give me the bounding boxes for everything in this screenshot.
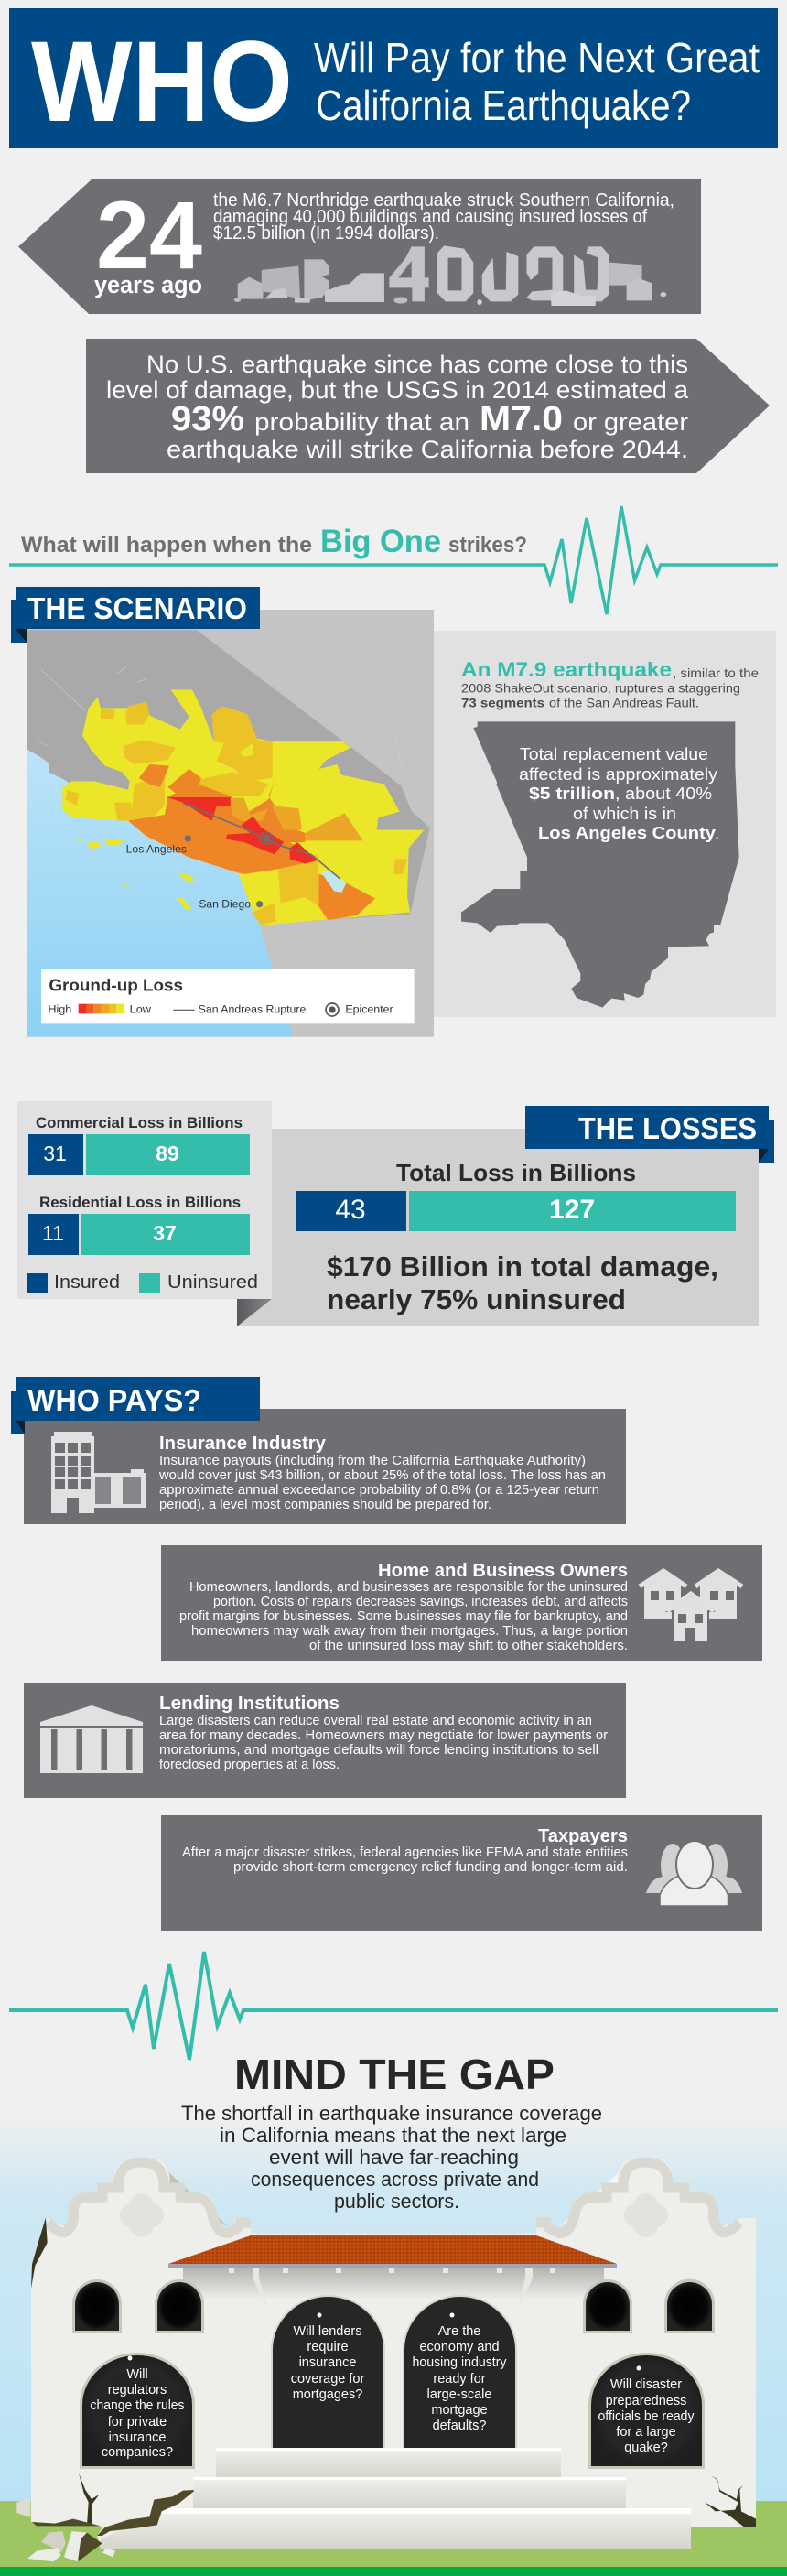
home body <box>179 1580 628 1653</box>
right crack <box>705 2475 756 2527</box>
text: shortfall paragraph: consequences across private and <box>251 2168 539 2191</box>
home heading: Home and Business Owners <box>378 1561 628 1581</box>
residential heading: Residential Loss in Billions <box>39 1194 241 1211</box>
insurance heading: Insurance Industry <box>159 1434 327 1454</box>
door: economy question <box>403 2295 517 2451</box>
city: Los Angeles <box>126 835 191 856</box>
total damage callout: nearly 75% uninsured <box>327 1283 626 1315</box>
epicenter marker <box>260 832 273 844</box>
M7.9 text <box>461 658 759 710</box>
text: shortfall paragraph <box>181 2102 602 2213</box>
insurance body: would cover just $43 billion, or about 25% of the total loss. The loss has an <box>158 1468 606 1483</box>
section tag: THE SCENARIO: THE SCENARIO <box>27 591 247 625</box>
years ago: years ago <box>94 271 202 298</box>
replacement value text: affected is approximately <box>519 764 718 784</box>
city: Los Angeles: Los Angeles <box>126 844 187 856</box>
bar: commercial <box>28 1134 250 1175</box>
left gable band <box>48 2162 251 2233</box>
door: economy question: economy and <box>419 2340 500 2354</box>
door: lenders question: require <box>307 2340 349 2354</box>
Northridge description: damaging 40,000 buildings and causing insured losses of <box>213 207 647 227</box>
taxpayers heading: Taxpayers <box>538 1826 628 1846</box>
right quatrefoil <box>624 2193 668 2237</box>
window: regulators question <box>80 2353 195 2469</box>
left tower side shade <box>166 2170 229 2227</box>
text: shortfall paragraph: event will have far-reaching <box>269 2146 519 2169</box>
replacement value text: Los Angeles County <box>538 823 717 842</box>
probability text <box>106 351 689 463</box>
seismic line <box>9 506 778 614</box>
map legend: Ground-up Loss <box>49 976 183 995</box>
probability text: level of damage, but the USGS in 2014 estimated a <box>106 376 689 404</box>
arrow panel: 24 years ago <box>18 179 701 314</box>
building wall <box>31 2157 756 2549</box>
text: shortfall paragraph: public sectors. <box>334 2190 459 2213</box>
text: shortfall paragraph: The shortfall in earthquake insurance coverage <box>181 2102 602 2125</box>
rafter tails <box>229 2268 555 2306</box>
bar: residential: 11 <box>42 1221 64 1245</box>
steps <box>101 2448 691 2549</box>
total damage callout <box>327 1250 718 1315</box>
heading: mind the gap: MIND THE GAP <box>234 2051 555 2098</box>
probability text: No U.S. earthquake since has come close to this <box>146 351 688 378</box>
lending body <box>159 1714 608 1772</box>
panel: insurance industry <box>24 1409 626 1524</box>
insurance body: Insurance payouts (including from the California Earthquake Authority) <box>159 1454 586 1468</box>
bar: total loss <box>296 1191 736 1231</box>
map legend: High <box>48 1003 71 1016</box>
replacement value text: , about 40% <box>615 784 712 803</box>
M7.9 text: 2008 ShakeOut scenario, ruptures a staggering <box>461 681 740 696</box>
window: preparedness question: for a large <box>616 2425 676 2440</box>
sky background <box>0 2115 787 2501</box>
taxpayers body: provide short-term emergency relief funding and longer-term aid. <box>233 1860 628 1875</box>
replacement value text: $5 trillion <box>529 784 615 803</box>
icon: houses <box>640 1571 742 1642</box>
roof <box>168 2235 617 2268</box>
section tag: WHO PAYS?: WHO PAYS? <box>27 1383 201 1417</box>
door: economy question: housing industry <box>412 2355 507 2370</box>
window: regulators question: insurance <box>109 2430 166 2445</box>
map legend: Low <box>130 1003 151 1016</box>
panel: taxpayers <box>161 1815 762 1931</box>
map islands <box>73 839 195 909</box>
right gable band <box>536 2162 739 2233</box>
heading: what will happen <box>21 524 527 559</box>
replacement value text: of which is in <box>573 804 676 823</box>
map legend: San Andreas Rupture <box>199 1003 307 1016</box>
window: regulators question: companies? <box>102 2445 173 2460</box>
probability text: 93% <box>171 400 244 438</box>
window: preparedness question: quake? <box>624 2441 668 2455</box>
panel fold <box>237 1299 272 1326</box>
lending body: Large disasters can reduce overall real estate and economic activity in an <box>159 1714 592 1728</box>
seismic line <box>9 1952 778 2060</box>
taxpayers body: After a major disaster strikes, federal agencies like FEMA and state entities <box>182 1845 628 1860</box>
window: preparedness question: officials be ready <box>598 2409 695 2424</box>
illustration: 40,000 rubble skyline <box>234 245 666 306</box>
door: economy question: mortgage <box>431 2403 488 2418</box>
bar: total loss: 127 <box>549 1195 595 1225</box>
probability text: or greater <box>573 408 688 436</box>
total loss heading: Total Loss in Billions <box>396 1159 636 1186</box>
legend <box>27 1272 258 1293</box>
M7.9 text: 73 segments <box>461 696 544 710</box>
lending heading: Lending Institutions <box>159 1694 340 1714</box>
replacement value text <box>519 744 719 842</box>
heading: what will happen: What will happen when the <box>21 533 312 557</box>
insurance body: period), a level most companies should be prepared for. <box>159 1498 491 1512</box>
section tag: THE LOSSES: THE LOSSES <box>578 1111 757 1145</box>
home body: of the uninsured loss may shift to other stakeholders. <box>309 1639 628 1653</box>
rubble <box>27 2531 115 2561</box>
panel: lending institutions <box>24 1683 626 1798</box>
home body: portion. Costs of repairs decreases savings, increases debt, and affects <box>213 1595 628 1609</box>
San Andreas rupture line <box>183 803 340 879</box>
icon: bank <box>40 1705 143 1773</box>
panel: home and business owners <box>161 1545 762 1661</box>
M7.9 text: , similar to the <box>673 666 759 680</box>
Northridge description: the M6.7 Northridge earthquake struck Southern California, <box>213 190 674 211</box>
title: rest of headline: California Earthquake? <box>316 81 691 129</box>
Los Angeles County shape <box>461 721 739 1008</box>
replacement value text: . <box>715 823 719 842</box>
map: ground-up loss <box>27 610 434 1037</box>
M7.9 text: An M7.9 earthquake <box>461 658 672 681</box>
big number 24: 24 <box>96 182 202 289</box>
city: San Diego: San Diego <box>199 899 251 911</box>
door: economy question: Are the <box>438 2324 480 2339</box>
Northridge description <box>213 190 674 244</box>
total damage callout: $170 Billion in total damage, <box>327 1250 718 1283</box>
left quatrefoil <box>120 2193 164 2237</box>
bar: commercial: 31 <box>43 1142 67 1165</box>
section tag: THE LOSSES <box>525 1106 774 1163</box>
lending body: moratoriums, and mortgage defaults will force lending institutions to sell <box>159 1743 598 1758</box>
map rivers <box>38 666 433 827</box>
section tag: THE SCENARIO <box>11 587 260 643</box>
illustration: damaged mission building <box>16 2157 756 2561</box>
map legend <box>41 969 415 1023</box>
title: rest of headline <box>314 34 760 129</box>
door: lenders question: Will lenders <box>294 2324 361 2339</box>
lending body: area for many decades. Homeowners may negotiate for lower payments or <box>159 1728 608 1743</box>
lending body: foreclosed properties at a loss. <box>159 1758 340 1772</box>
window: preparedness question: Will disaster <box>610 2377 682 2392</box>
home body: homeowners may walk away from their mortgages. Thus, a large portion <box>191 1624 628 1639</box>
small windows <box>72 2279 715 2333</box>
heading: what will happen: Big One <box>320 524 441 559</box>
insurance body <box>158 1454 606 1512</box>
bar: residential: 37 <box>153 1221 177 1245</box>
window: regulators question: regulators <box>108 2383 167 2397</box>
probability text: M7.0 <box>480 400 563 438</box>
icon: people <box>646 1841 742 1906</box>
heading: what will happen: strikes? <box>448 533 527 557</box>
cracks <box>16 2218 194 2536</box>
door: economy question: ready for <box>433 2372 486 2387</box>
taxpayers body <box>182 1845 628 1875</box>
home body: Homeowners, landlords, and businesses are responsible for the uninsured <box>189 1580 628 1595</box>
M7.9 text: of the San Andreas Fault. <box>549 696 699 710</box>
panel: total loss <box>237 1129 759 1326</box>
insurance body: approximate annual exceedance probability of 0.8% (or a 125-year return <box>159 1483 599 1498</box>
Northridge description: $12.5 billion (In 1994 dollars). <box>213 223 439 244</box>
bar: commercial: 89 <box>156 1142 179 1165</box>
title: WHO: WHO <box>31 18 293 146</box>
panel: scenario description <box>434 631 776 1017</box>
legend: Insured <box>54 1272 120 1293</box>
window: regulators question: for private <box>108 2415 167 2430</box>
icon: office buildings <box>51 1432 146 1513</box>
door: economy question: defaults? <box>433 2419 486 2433</box>
window: preparedness question: preparedness <box>606 2394 686 2408</box>
legend: Uninsured <box>167 1272 258 1293</box>
window: preparedness question <box>588 2353 705 2469</box>
right tower side highlight <box>559 2170 622 2227</box>
door: lenders question: coverage for <box>291 2372 364 2387</box>
eave shadow <box>183 2268 604 2300</box>
window: regulators question: Will <box>126 2367 148 2382</box>
door: economy question: large-scale <box>427 2387 491 2402</box>
home body: profit margins for businesses. Some businesses may file for bankruptcy, and <box>179 1609 628 1624</box>
door: lenders question: mortgages? <box>293 2387 362 2402</box>
replacement value text: Total replacement value <box>520 744 708 763</box>
arrow panel: 93% probability <box>86 339 770 473</box>
commercial heading: Commercial Loss in Billions <box>36 1114 243 1131</box>
map legend: Epicenter <box>345 1003 394 1016</box>
door: lenders question: insurance <box>299 2355 356 2370</box>
ground <box>0 2501 787 2576</box>
probability text: probability that an <box>254 408 469 436</box>
header banner <box>9 8 778 148</box>
door: lenders question <box>271 2295 385 2451</box>
bar: total loss: 43 <box>335 1195 366 1225</box>
text: shortfall paragraph: in California means that the next large <box>220 2124 566 2147</box>
section tag: WHO PAYS? <box>11 1377 260 1434</box>
window: regulators question: change the rules <box>90 2398 185 2413</box>
panel: commercial and residential loss <box>17 1101 272 1299</box>
probability text: earthquake will strike California before 2044. <box>167 436 688 463</box>
bar: residential <box>28 1214 250 1255</box>
